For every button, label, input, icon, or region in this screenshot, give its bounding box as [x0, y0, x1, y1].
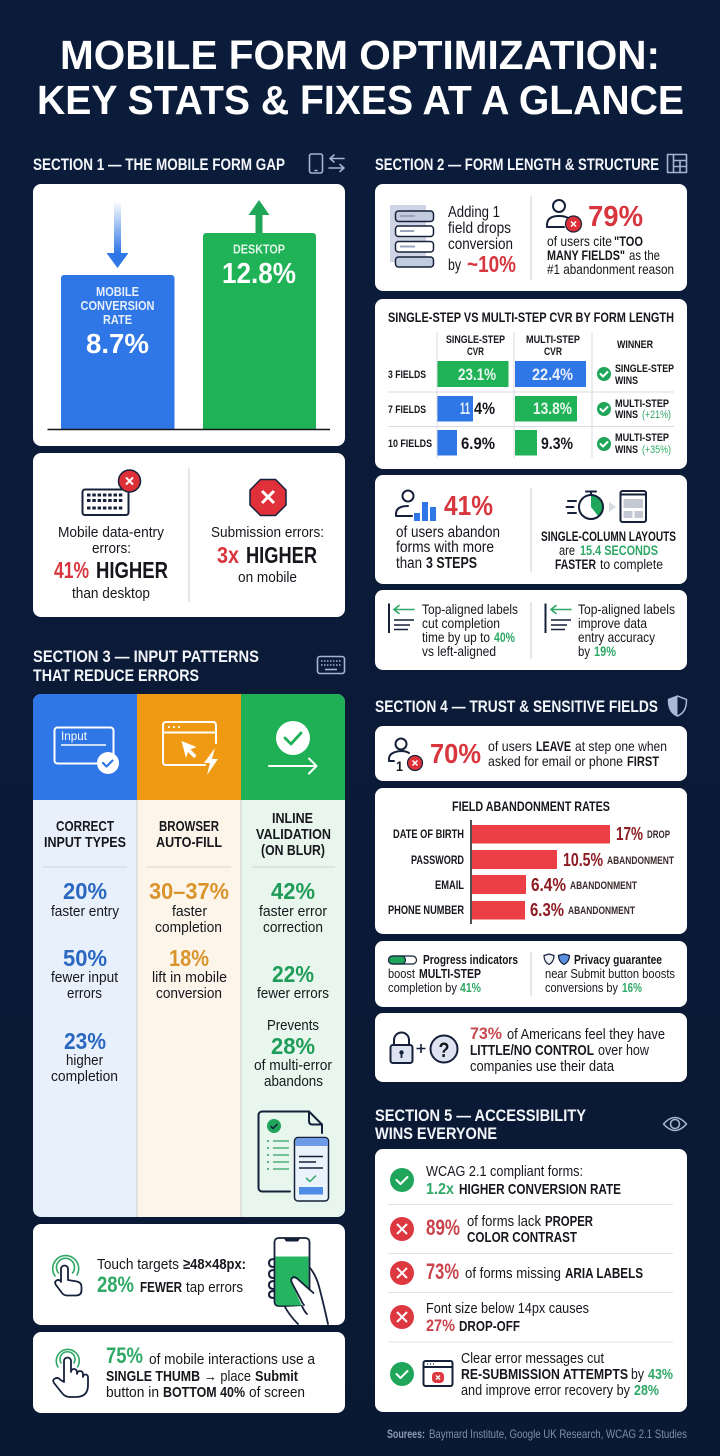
icon: lock and question: ? [438, 1039, 450, 1062]
column: inline validation: INLINE [272, 810, 313, 827]
text: 70 percent: LEAVE [536, 738, 571, 754]
panel: accessibility [375, 1149, 687, 1412]
text: 79 percent: of users cite [547, 233, 612, 249]
panel: single thumb [33, 1332, 345, 1413]
row: email: 6.4% [531, 875, 566, 895]
panel: leave at step one [375, 726, 687, 781]
column: inline validation: 22% [272, 961, 314, 987]
text: 41 percent abandon: forms with more [396, 539, 494, 556]
icon: user step one: 1 [396, 758, 403, 774]
text: adding one field: by [448, 257, 461, 274]
row: 3 fields: SINGLE-STEP [615, 363, 674, 375]
column: browser auto-fill: 18% [169, 945, 209, 971]
column: inline validation: correction [263, 919, 323, 936]
row: 3 fields: WINS [615, 375, 638, 387]
icon: top-aligned label right [546, 604, 571, 633]
row: 10 fields: WINS [615, 444, 638, 456]
column: inline validation: faster error [259, 903, 327, 920]
heading: section 5: WINS EVERYONE [375, 1125, 497, 1143]
text: cut completion time: cut completion [422, 615, 500, 631]
row: 7 fields: 13.8% [533, 399, 572, 418]
heading: section 5 [375, 1107, 686, 1143]
panel: single-step vs multi-step table [375, 299, 687, 469]
column headers: SINGLE-STEP [446, 334, 505, 346]
icon: input field [54, 728, 119, 774]
column: correct input types: errors [67, 985, 102, 1002]
text: 73 percent americans: of Americans feel they have [507, 1026, 665, 1043]
title: KEY STATS & FIXES AT A GLANCE [37, 77, 684, 123]
column: browser auto-fill: AUTO-FILL [156, 834, 222, 851]
row: color contrast: COLOR CONTRAST [467, 1229, 577, 1246]
text: 70 percent: FIRST [627, 753, 659, 769]
row: 10 fields: 9.3% [541, 434, 573, 453]
text: 70 percent: of users [488, 738, 532, 754]
text: improve accuracy: 19% [594, 643, 616, 659]
row: date of birth: 17% [616, 824, 643, 844]
text: data-entry errors: Mobile data-entry [58, 524, 164, 541]
text: touch targets: FEWER [140, 1279, 182, 1296]
panel: data control [375, 1013, 687, 1082]
text: single-column layouts: 15.4 SECONDS [580, 543, 658, 558]
text: single thumb [106, 1343, 316, 1401]
heading: section 3: SECTION 3 — INPUT PATTERNS [33, 648, 259, 666]
heading: section 1: SECTION 1 — THE MOBILE FORM GAP [33, 156, 285, 174]
text: progress indicators: Progress indicators [423, 952, 518, 967]
row: font size [390, 1300, 589, 1335]
column headers: WINNER [617, 339, 653, 351]
column: inline validation: fewer errors [257, 985, 329, 1002]
panel: progress and privacy [375, 941, 687, 1007]
column: correct input types: 50% [63, 945, 107, 971]
text: touch targets: tap errors [186, 1279, 243, 1296]
text: single-column layouts: SINGLE-COLUMN LAYOUTS [541, 529, 676, 544]
text: improve accuracy: Top-aligned labels [578, 601, 675, 617]
row: error messages [390, 1350, 673, 1399]
panel: conversion bar chart [33, 184, 345, 446]
text: data-entry errors: errors: [92, 540, 131, 557]
column headers: CVR [467, 346, 484, 358]
text: single-column layouts: to complete [600, 557, 663, 572]
text: touch targets: Touch targets [97, 1256, 179, 1273]
column: browser auto-fill [137, 694, 241, 1002]
text: 79 percent: as the [629, 247, 660, 263]
row: 10 fields [388, 430, 671, 456]
text: single thumb: 75% [106, 1343, 143, 1368]
row: error messages: 28% [634, 1382, 659, 1399]
bar: mobile: RATE [103, 313, 132, 327]
column: correct input types: faster entry [51, 903, 119, 920]
column: inline validation: abandons [264, 1073, 323, 1090]
column: correct input types: completion [51, 1068, 118, 1085]
icon: user with error [547, 200, 582, 232]
text: submission errors: 3x [217, 542, 239, 568]
text: privacy guarantee: Privacy guarantee [574, 952, 662, 967]
row: phone number: ABANDONMENT [568, 905, 635, 917]
text: 79 percent: 79% [588, 201, 643, 233]
column: browser auto-fill: conversion [156, 985, 222, 1002]
title [37, 32, 684, 123]
row: date of birth [393, 824, 670, 844]
text: cut completion time: 40% [494, 629, 515, 645]
column: correct input types [33, 694, 137, 1085]
text: 79 percent [547, 201, 674, 277]
icon: phone in hand [269, 1238, 328, 1325]
row: color contrast: PROPER [545, 1213, 593, 1230]
panel: steps and single-column [375, 475, 687, 584]
text: progress indicators: completion by [388, 980, 457, 995]
panel: input patterns [33, 694, 345, 1217]
column: browser auto-fill: completion [155, 919, 222, 936]
row: WCAG: 1.2x [426, 1181, 454, 1198]
text: touch targets: ≥48×48px: [183, 1256, 246, 1273]
column: browser auto-fill: lift in mobile [152, 969, 227, 986]
text: 79 percent: #1 abandonment reason [547, 261, 674, 277]
row: 3 fields: 3 FIELDS [388, 369, 426, 381]
row: aria labels: of forms missing [465, 1265, 561, 1282]
text: submission errors [211, 524, 324, 586]
text: 70 percent: at step one when [575, 738, 667, 754]
panel: field abandonment chart [375, 788, 687, 934]
column: inline validation: of multi-error [254, 1057, 332, 1074]
row: phone number: PHONE NUMBER [388, 903, 464, 917]
text: 73 percent americans: companies use their data [470, 1058, 615, 1075]
text: 41 percent abandon: 3 STEPS [426, 555, 477, 572]
text: progress indicators: boost [388, 966, 415, 981]
text: 73 percent americans: LITTLE/NO CONTROL [470, 1042, 594, 1059]
icon: browser autofill [163, 722, 218, 775]
sources: Sourees: [387, 1427, 425, 1441]
row: email [435, 875, 637, 895]
icon: top-aligned label left [389, 604, 414, 633]
text: 79 percent: MANY FIELDS" [547, 247, 625, 263]
text: 70 percent: 70% [430, 738, 481, 769]
bar: desktop [203, 233, 316, 429]
bar: desktop: 12.8% [222, 258, 296, 290]
text: adding one field [448, 204, 516, 277]
row: color contrast: 89% [426, 1215, 460, 1240]
text: data-entry errors: HIGHER [96, 557, 168, 583]
row: color contrast [390, 1213, 593, 1246]
row: email: EMAIL [435, 878, 464, 892]
column headers: MULTI-STEP [526, 334, 580, 346]
row: aria labels: 73% [426, 1259, 459, 1284]
text: progress indicators: 41% [460, 980, 481, 995]
text: single thumb: button in [106, 1384, 159, 1401]
icon: lock and question [390, 1032, 458, 1063]
text: 41 percent abandon [396, 490, 500, 572]
row: password: 10.5% [563, 850, 603, 870]
row: password: PASSWORD [411, 853, 464, 867]
column: correct input types: INPUT TYPES [44, 834, 126, 851]
text: 73 percent americans: over how [598, 1042, 649, 1059]
text: submission errors: HIGHER [246, 542, 317, 568]
row: 7 fields: 7 FIELDS [388, 404, 426, 416]
text: single thumb: Submit [255, 1368, 298, 1385]
row: 7 fields [388, 396, 671, 422]
icon: validated document [258, 1112, 328, 1201]
column: browser auto-fill: faster [172, 903, 207, 920]
text: data-entry errors: than desktop [72, 585, 150, 602]
heading: section 3: THAT REDUCE ERRORS [33, 667, 199, 685]
row: error messages: by [631, 1366, 644, 1383]
text: adding one field: ~10% [467, 251, 516, 277]
text: submission errors: on mobile [238, 569, 297, 586]
text: 70 percent: asked for email or phone [488, 753, 623, 769]
column: correct input types: CORRECT [56, 818, 114, 835]
text: single-column layouts [541, 529, 676, 572]
bar: mobile: CONVERSION [80, 299, 154, 313]
row: 7 fields: 11 [460, 399, 470, 418]
title: MOBILE FORM OPTIMIZATION: [60, 32, 660, 78]
column: inline validation: Prevents [267, 1017, 319, 1034]
row: error messages: 43% [648, 1366, 673, 1383]
text: 41 percent abandon: 41% [444, 490, 493, 521]
row: phone number: 6.3% [530, 900, 564, 920]
row: color contrast: of forms lack [467, 1213, 541, 1230]
text: single thumb: BOTTOM 40% [163, 1384, 245, 1401]
row: 7 fields: WINS [615, 409, 638, 421]
icon: form field stack [390, 205, 434, 267]
heading: section 4: SECTION 4 — TRUST & SENSITIVE FIELDS [375, 698, 658, 716]
row: error messages: Clear error messages cut [461, 1350, 605, 1367]
text: touch targets [97, 1256, 246, 1297]
column: correct input types: 23% [64, 1028, 106, 1054]
row: 7 fields: 4% [474, 399, 495, 418]
column: inline validation: (ON BLUR) [261, 842, 325, 859]
text: improve accuracy [578, 601, 675, 659]
bar: mobile [61, 275, 174, 429]
row: font size: 27% [426, 1316, 455, 1335]
bar: mobile: MOBILE [96, 285, 139, 299]
row: 3 fields: 22.4% [532, 365, 573, 384]
panel: top-aligned labels [375, 590, 687, 670]
text: adding one field: field drops [448, 220, 511, 237]
text: single thumb: SINGLE THUMB [106, 1368, 200, 1385]
icon: stopwatch and layout [566, 491, 646, 522]
text: data-entry errors [54, 524, 168, 602]
row: font size: DROP-OFF [459, 1318, 520, 1335]
column: correct input types: 20% [63, 878, 107, 904]
row: aria labels: ARIA LABELS [565, 1265, 643, 1282]
column: correct input types: higher [66, 1052, 103, 1069]
text: single thumb: → place [204, 1368, 251, 1385]
heading: section 5: SECTION 5 — ACCESSIBILITY [375, 1107, 586, 1125]
text: touch targets: 28% [97, 1272, 134, 1297]
text: single-column layouts: are [559, 543, 575, 558]
column: inline validation [241, 694, 345, 1201]
panel: touch targets [33, 1224, 345, 1325]
row: WCAG: WCAG 2.1 compliant forms: [426, 1163, 583, 1180]
arrow: down [114, 201, 121, 253]
text: privacy guarantee: conversions by [545, 980, 618, 995]
row: password: ABANDONMENT [607, 855, 674, 867]
row: password [411, 850, 674, 870]
arrow: up [248, 200, 270, 233]
row: phone number [388, 900, 635, 920]
row: 7 fields: MULTI-STEP [615, 398, 669, 410]
row: font size: Font size below 14px causes [426, 1300, 589, 1317]
icon: validation check [269, 721, 316, 774]
text: adding one field: Adding 1 [448, 204, 500, 221]
text: improve accuracy: improve data [578, 615, 647, 631]
text: 79 percent: "TOO [614, 233, 643, 249]
text: progress indicators: MULTI-STEP [419, 966, 481, 981]
text: cut completion time [422, 601, 518, 659]
row: email: ABANDONMENT [570, 880, 637, 892]
bar: mobile: 8.7% [86, 328, 149, 359]
text: single thumb: of mobile interactions use a [149, 1351, 316, 1368]
text: privacy guarantee: near Submit button boosts [545, 966, 675, 981]
text: 41 percent abandon: than [396, 555, 422, 572]
row: WCAG [390, 1163, 621, 1198]
text: 41 percent abandon: of users abandon [396, 524, 500, 541]
text: privacy guarantee: 16% [622, 980, 642, 995]
row: error messages: RE-SUBMISSION ATTEMPTS [461, 1366, 628, 1383]
text: 70 percent [430, 738, 667, 769]
icon: user step one [389, 738, 422, 774]
panel: error stats [33, 453, 345, 617]
text: single-column layouts: FASTER [555, 557, 596, 572]
text: cut completion time: vs left-aligned [422, 643, 496, 659]
row: date of birth: DATE OF BIRTH [393, 827, 464, 841]
column headers: CVR [544, 346, 562, 358]
column: correct input types: fewer input [51, 969, 119, 986]
icon: touch hand [53, 1256, 82, 1296]
row: date of birth: DROP [647, 829, 670, 841]
column: inline validation: VALIDATION [256, 826, 331, 843]
text: submission errors: Submission errors: [211, 524, 324, 541]
text: adding one field: conversion [448, 236, 513, 253]
column headers [446, 334, 653, 358]
row: WCAG: HIGHER CONVERSION RATE [459, 1181, 621, 1198]
text: cut completion time: time by up to [422, 629, 490, 645]
text: progress indicators [388, 952, 518, 995]
row: error messages: and improve error recovery by [461, 1382, 630, 1399]
text: improve accuracy: entry accuracy [578, 629, 655, 645]
text: single thumb: of screen [249, 1384, 305, 1401]
icon: user with bars [396, 490, 436, 521]
text: improve accuracy: by [578, 643, 590, 659]
row: 3 fields [388, 361, 674, 387]
column: browser auto-fill: 30–37% [149, 878, 229, 904]
icon: stop octagon [250, 480, 286, 516]
text: cut completion time: Top-aligned labels [422, 601, 518, 617]
text: data-entry errors: 41% [54, 557, 89, 583]
text: privacy guarantee [544, 952, 675, 995]
row: aria labels [390, 1259, 643, 1285]
row: 10 fields: MULTI-STEP [615, 432, 669, 444]
row: 10 fields: (+35%) [642, 444, 671, 456]
icon: thumb hand [53, 1349, 88, 1397]
row: 7 fields: (+21%) [642, 409, 671, 421]
column: browser auto-fill: BROWSER [159, 818, 219, 835]
heading: section 3 [33, 648, 344, 685]
row: 3 fields: 23.1% [458, 365, 496, 384]
chart title: FIELD ABANDONMENT RATES [452, 798, 610, 814]
column: inline validation: 28% [271, 1033, 315, 1059]
icon: input field: Input [61, 731, 88, 743]
column: inline validation: 42% [271, 878, 315, 904]
panel: form length stats [375, 184, 687, 291]
row: 10 fields: 10 FIELDS [388, 438, 432, 450]
bar: desktop: DESKTOP [233, 242, 285, 256]
row: 10 fields: 6.9% [461, 434, 495, 453]
icon: keyboard error [82, 470, 140, 515]
text: 73 percent americans [470, 1024, 665, 1075]
text: 73 percent americans: 73% [470, 1024, 502, 1043]
